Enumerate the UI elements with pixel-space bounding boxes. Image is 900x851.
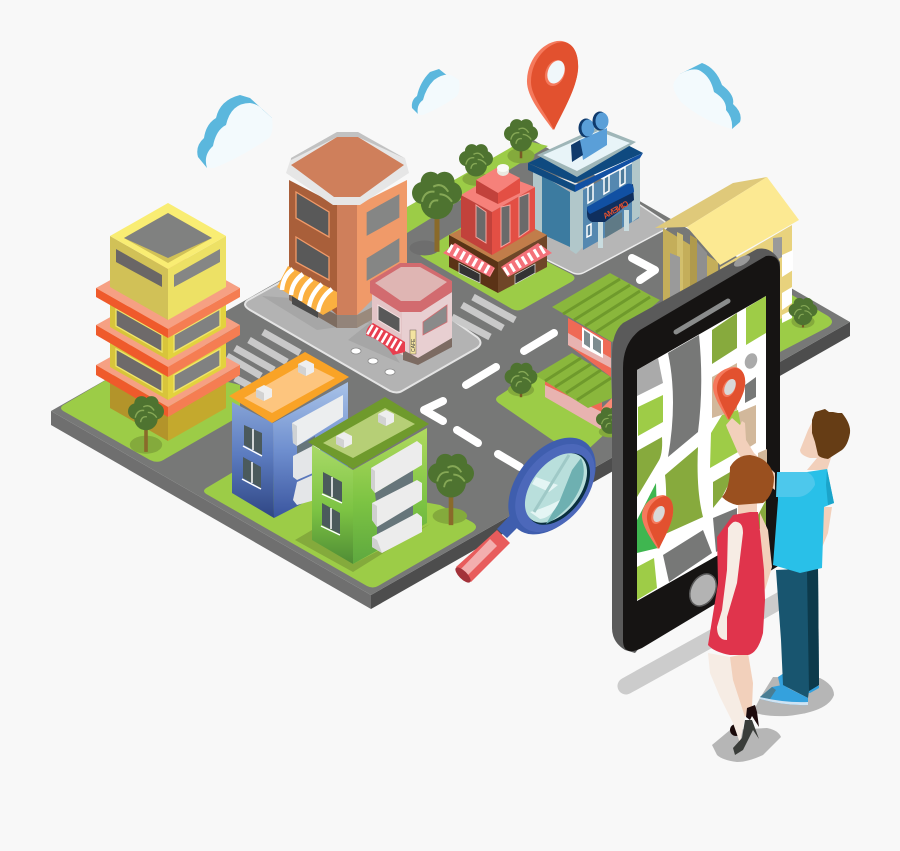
road markings bbox=[424, 258, 655, 467]
icon: film camera sign bbox=[571, 112, 608, 162]
green patch: farm building bbox=[496, 372, 620, 457]
tree: left bbox=[128, 396, 164, 454]
building: farm with green roofs bbox=[535, 273, 660, 430]
top floor windows bbox=[116, 249, 162, 287]
green patch: left bbox=[61, 360, 240, 462]
map pin: large bbox=[527, 41, 578, 130]
woman neck bbox=[738, 503, 757, 514]
awning: orange striped bbox=[277, 266, 337, 318]
smartphone bbox=[612, 249, 780, 653]
kiosk roof bbox=[370, 263, 452, 312]
tree: back second bbox=[459, 144, 493, 186]
cinema door and columns bbox=[605, 212, 622, 238]
blue roof bbox=[229, 352, 349, 423]
green patch: bottom bbox=[204, 468, 476, 588]
slab 2 bbox=[96, 285, 240, 367]
woman dress bbox=[708, 512, 765, 655]
man shirt bbox=[773, 469, 834, 573]
building: blue apartment bbox=[229, 352, 349, 518]
cloud: left bbox=[197, 95, 273, 168]
cafe sign: CAFE bbox=[411, 338, 417, 352]
tree: large back bbox=[410, 172, 462, 256]
woman legs bbox=[708, 653, 745, 743]
man left arm bbox=[821, 507, 832, 550]
phone shadow bbox=[626, 595, 790, 686]
man back shoe bbox=[778, 673, 819, 693]
green patch: right corner bbox=[770, 290, 832, 352]
green windows bbox=[322, 472, 342, 534]
storefront windows bbox=[459, 263, 535, 284]
woman hair bbox=[722, 455, 774, 505]
tree: front right bbox=[428, 454, 474, 525]
man shadow bbox=[753, 677, 834, 716]
upper block bbox=[476, 167, 520, 193]
cinema windows bbox=[587, 167, 625, 237]
top floor walls bbox=[110, 236, 168, 320]
green patch: red building bbox=[420, 222, 574, 310]
awning: right bbox=[501, 243, 552, 277]
white balcony panels bbox=[292, 395, 343, 446]
cloud: middle bbox=[412, 69, 460, 115]
building: green apartment bbox=[308, 397, 429, 564]
base block bbox=[449, 210, 547, 262]
kiosk awning bbox=[366, 323, 405, 355]
cinema sign text (mirrored): CINEMA bbox=[601, 199, 630, 221]
tree: right corner bbox=[789, 298, 817, 328]
city platform bbox=[51, 138, 850, 609]
map pin: screen lower bbox=[642, 495, 673, 549]
man hair bbox=[812, 409, 850, 459]
cinema marquee bbox=[587, 184, 634, 222]
crosswalk: left bbox=[227, 332, 300, 386]
roof top bbox=[291, 137, 404, 197]
building: cinema bbox=[528, 112, 643, 254]
person: man pointing at phone bbox=[726, 409, 850, 716]
building: orange office bbox=[277, 132, 409, 328]
lens glass bbox=[512, 442, 600, 534]
white panels bbox=[371, 441, 422, 493]
phone face bbox=[623, 256, 780, 651]
person: woman in red dress bbox=[708, 455, 781, 762]
rooftop cap bbox=[497, 166, 509, 176]
lower walls bbox=[545, 382, 602, 430]
cinema walls bbox=[533, 170, 570, 247]
cloud: right bbox=[673, 63, 741, 129]
roof rim bbox=[286, 132, 409, 205]
phone earpiece and camera bbox=[676, 301, 728, 332]
man raised arm bbox=[726, 418, 775, 490]
white balcony bands bbox=[782, 250, 793, 277]
office windows bbox=[296, 192, 400, 282]
woman right arm bbox=[760, 513, 772, 590]
tree: farm right bbox=[596, 407, 624, 437]
kiosk windows bbox=[378, 305, 400, 333]
magnifying glass bbox=[453, 421, 613, 585]
yellow roof bbox=[110, 203, 226, 269]
building: yellow tower bbox=[96, 203, 240, 441]
tower bbox=[461, 195, 492, 255]
cinema pad bbox=[535, 170, 667, 274]
building: red restaurant bbox=[443, 164, 552, 293]
building: pink kiosk bbox=[366, 263, 452, 365]
woman shadow bbox=[712, 728, 781, 762]
green roof: lower bbox=[535, 353, 612, 408]
blue windows bbox=[243, 425, 262, 488]
cafe tables bbox=[351, 348, 395, 375]
gray bands bbox=[375, 470, 413, 510]
man front shoe bbox=[760, 685, 808, 705]
map pin: screen upper bbox=[713, 367, 745, 420]
woman left arm bbox=[717, 522, 743, 640]
roof cubes bbox=[336, 432, 352, 448]
green strip: back bbox=[407, 140, 548, 233]
building: garden house bbox=[655, 177, 799, 350]
woman back heel bbox=[730, 724, 742, 736]
man neck and face bbox=[800, 420, 832, 470]
roof cubes bbox=[256, 385, 272, 401]
slab 3 bbox=[96, 325, 240, 407]
cinema roof bbox=[537, 127, 636, 177]
lens ring bbox=[491, 421, 613, 551]
crosswalk: right bbox=[452, 297, 515, 337]
awning: left bbox=[443, 243, 495, 277]
green roof: upper bbox=[552, 273, 660, 342]
green roof bbox=[308, 397, 429, 469]
slab 1 bbox=[96, 248, 240, 329]
floor 2 bbox=[110, 300, 168, 360]
cinema eave bbox=[528, 130, 643, 183]
tree: back small bbox=[504, 119, 538, 163]
man trousers bbox=[776, 568, 819, 698]
tower windows bbox=[476, 193, 529, 247]
orange building pad bbox=[245, 274, 480, 392]
house roof front bbox=[687, 177, 799, 265]
house roof back bbox=[655, 177, 767, 228]
phone screen map bbox=[637, 296, 767, 601]
ground floor bbox=[110, 380, 168, 441]
phone home button bbox=[684, 569, 722, 611]
tree: farm front bbox=[505, 363, 537, 397]
floor 3 bbox=[110, 340, 168, 400]
phone side bbox=[612, 249, 780, 653]
woman high heels bbox=[733, 705, 759, 755]
